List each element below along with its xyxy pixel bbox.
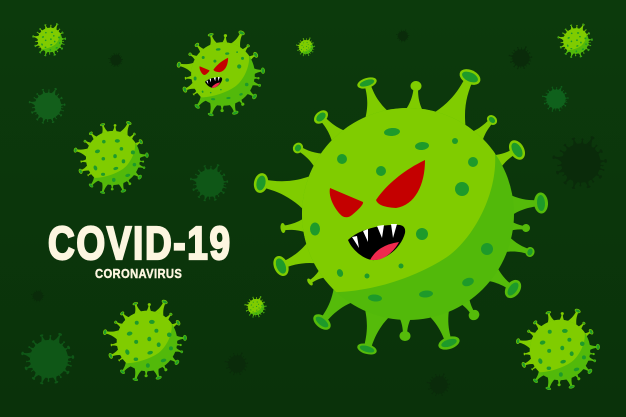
virus silhouette: dark top right [508, 46, 532, 70]
bright virus: tiny top centre [296, 37, 315, 57]
title: COVID-19 [48, 217, 232, 269]
virus silhouette: mid green centre left [189, 163, 228, 202]
virus silhouette: dark bottom centre [224, 352, 248, 376]
bright virus: medium bottom right [514, 306, 600, 392]
virus silhouette: mid green top right [542, 85, 569, 112]
bright virus: tiny lower centre [244, 295, 267, 318]
virus silhouette: dark right [551, 134, 607, 190]
large angry virus [248, 58, 549, 361]
subtitle: CORONAVIRUS [95, 266, 182, 281]
virus body with spikes [248, 58, 549, 361]
bright virus: tiny top right [557, 22, 593, 59]
virus silhouette: dark bottom [426, 373, 450, 397]
virus silhouette: mid green top left [28, 86, 66, 124]
virus silhouette: mid green bottom left [20, 331, 74, 385]
bright virus: tiny top left [32, 22, 66, 57]
bright virus: medium left [72, 118, 149, 196]
bright virus: medium bottom left [101, 297, 187, 383]
virus silhouette: dark top centre [396, 29, 409, 43]
angry face [330, 160, 425, 260]
small angry virus [175, 27, 265, 118]
virus surface spots [310, 127, 493, 302]
virus silhouette: dark left [31, 289, 44, 303]
virus silhouette: dark top left [108, 52, 123, 67]
